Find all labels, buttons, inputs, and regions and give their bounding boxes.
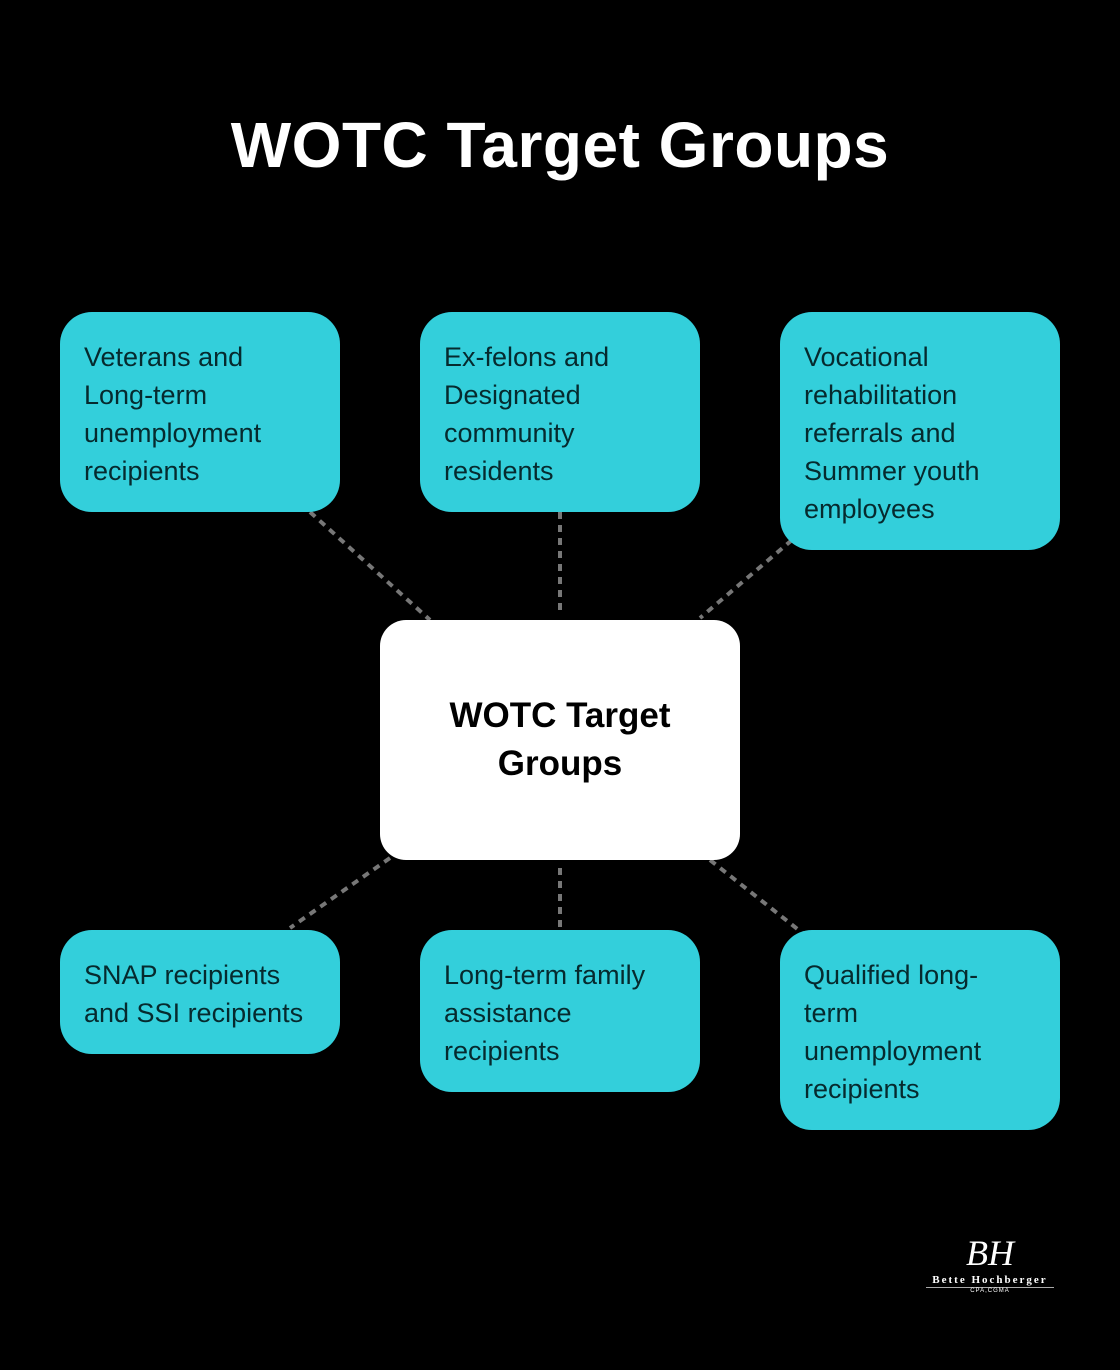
box: vocational: rehabilitation xyxy=(804,380,957,410)
box: family assistance: Long-term family xyxy=(444,960,645,990)
box: SNAP: and SSI recipients xyxy=(84,998,303,1028)
logo: BH xyxy=(966,1233,1014,1273)
center box xyxy=(380,620,740,860)
box: ex-felons: community xyxy=(444,418,575,448)
box: veterans: recipients xyxy=(84,456,200,486)
box: family assistance: recipients xyxy=(444,1036,560,1066)
box: vocational: Vocational xyxy=(804,342,929,372)
box: veterans: unemployment xyxy=(84,418,261,448)
box: vocational xyxy=(780,312,1060,550)
box: ex-felons: Ex-felons and xyxy=(444,342,609,372)
logo xyxy=(926,1233,1054,1294)
box: ex-felons: Designated xyxy=(444,380,581,410)
center box: WOTC Target xyxy=(449,696,670,735)
box: ex-felons xyxy=(420,312,700,512)
box: vocational: Summer youth xyxy=(804,456,980,486)
box: SNAP: SNAP recipients xyxy=(84,960,280,990)
box: SNAP xyxy=(60,930,340,1054)
box: qualified long-term: unemployment xyxy=(804,1036,981,1066)
box: ex-felons: residents xyxy=(444,456,554,486)
logo: CPA,CGMA xyxy=(970,1288,1010,1294)
box: qualified long-term: term xyxy=(804,998,858,1028)
box: family assistance: assistance xyxy=(444,998,572,1028)
box: veterans xyxy=(60,312,340,512)
box: veterans: Veterans and xyxy=(84,342,243,372)
logo: Bette Hochberger xyxy=(932,1274,1048,1286)
title: WOTC Target Groups xyxy=(231,109,889,181)
box: veterans: Long-term xyxy=(84,380,207,410)
box: vocational: referrals and xyxy=(804,418,956,448)
box: vocational: employees xyxy=(804,494,935,524)
center box: Groups xyxy=(498,744,622,783)
box: family assistance xyxy=(420,930,700,1092)
box: qualified long-term: Qualified long- xyxy=(804,960,978,990)
box: qualified long-term xyxy=(780,930,1060,1130)
box: qualified long-term: recipients xyxy=(804,1074,920,1104)
